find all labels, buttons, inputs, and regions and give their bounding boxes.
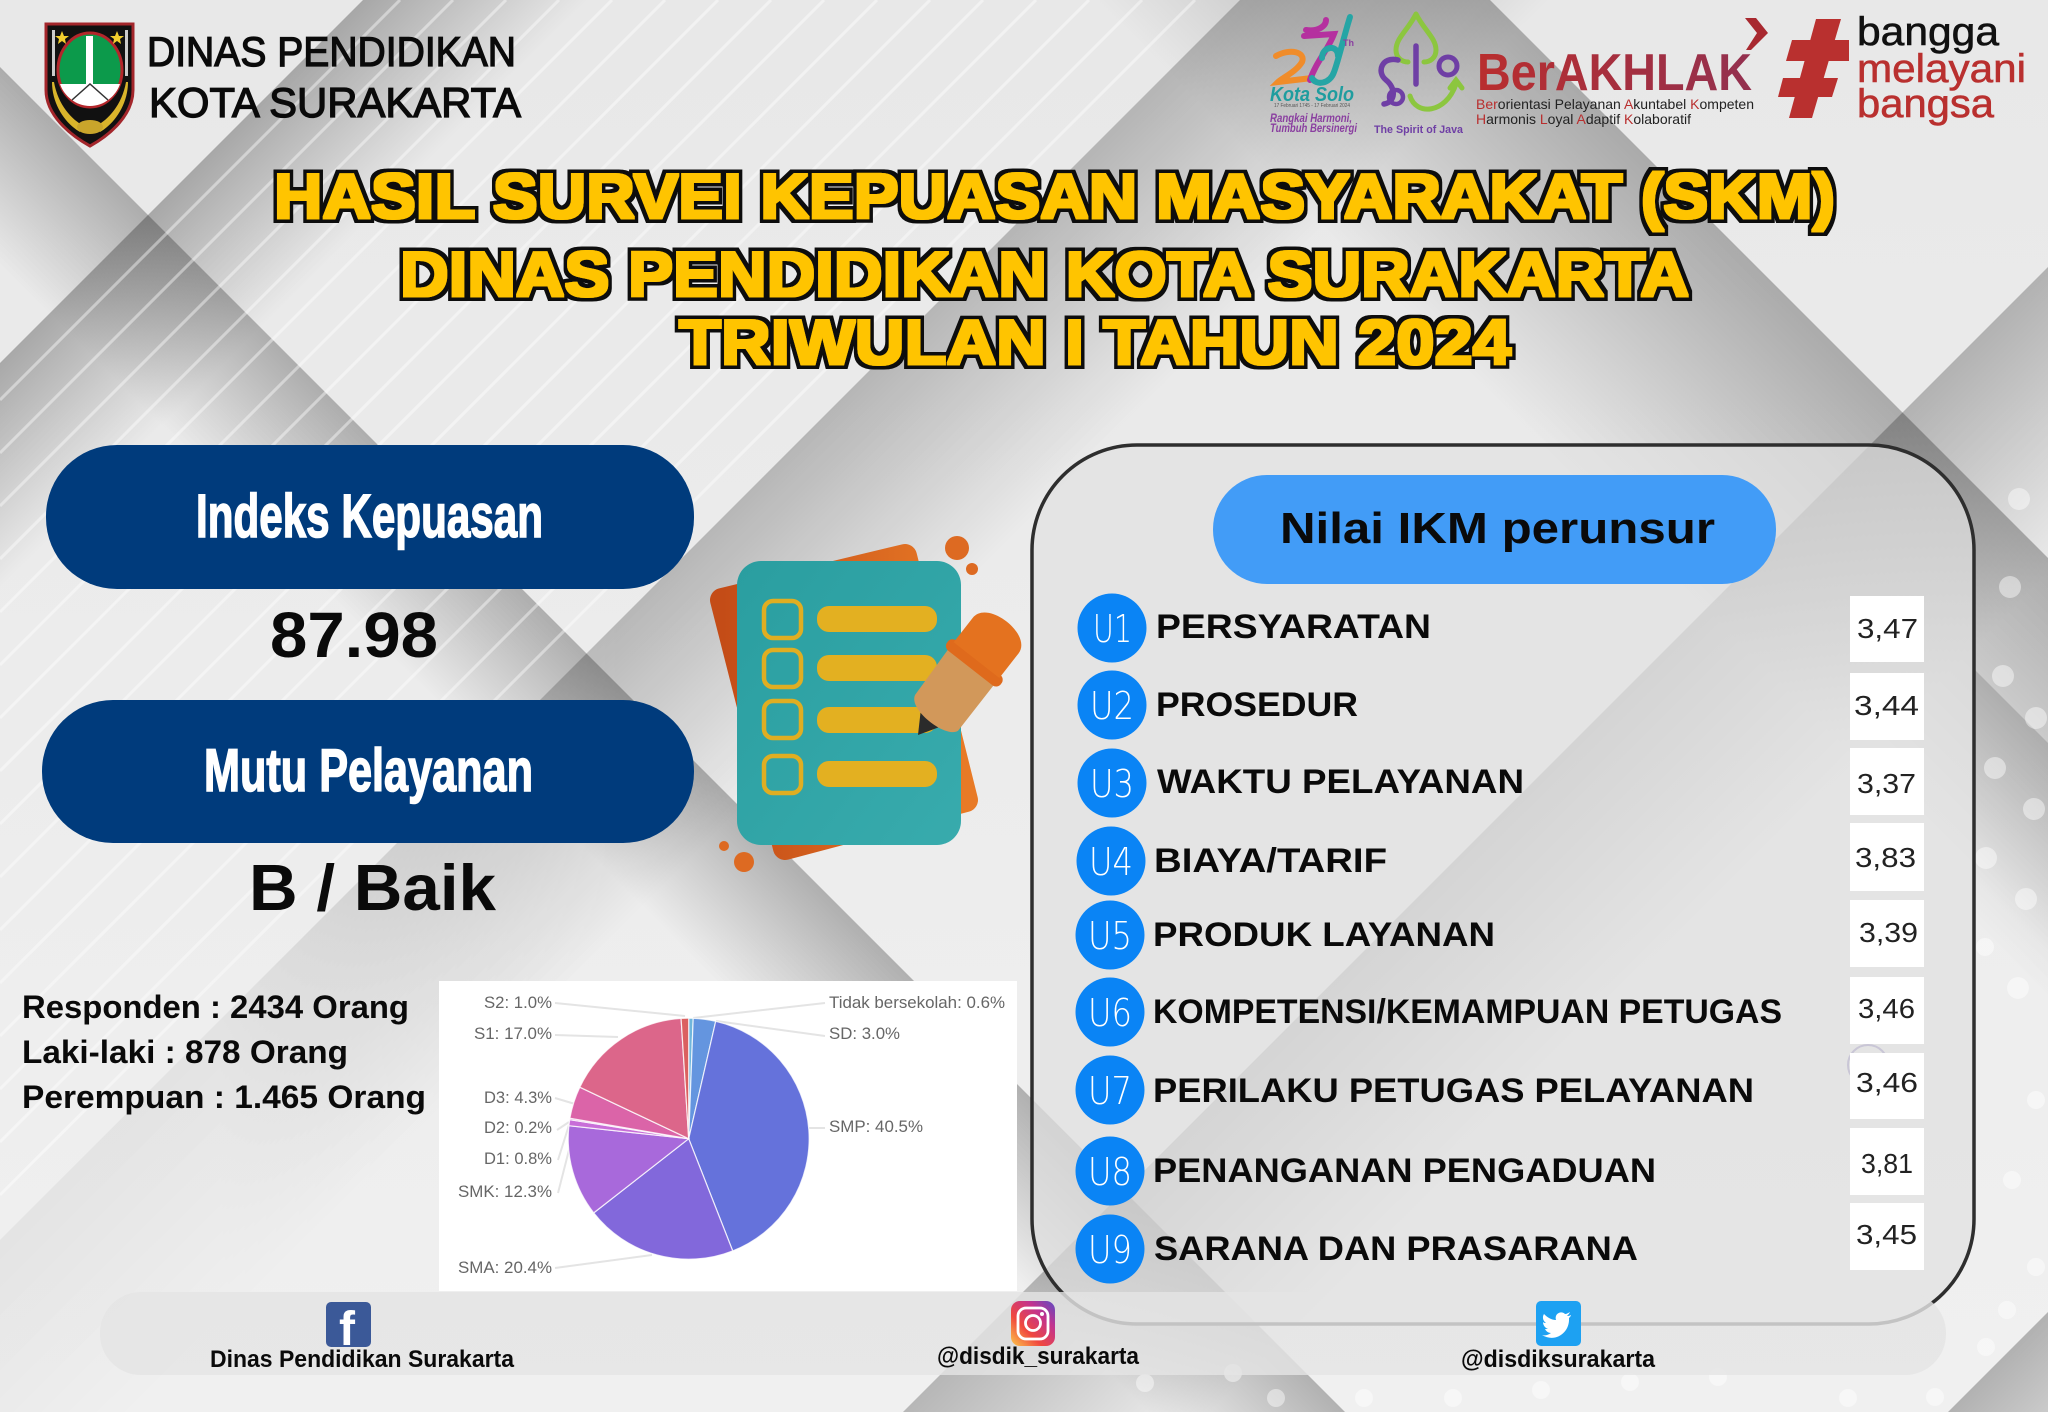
logo: BerAKHLAK [1476, 18, 1768, 127]
chart: education pie chart: Tidak bersekolah: 0.6% [829, 993, 1005, 1012]
icon: facebook: f [339, 1303, 356, 1356]
icon: checklist clipboard with pencil [719, 536, 1033, 872]
row U8 [1076, 1128, 1924, 1206]
chart: education pie chart: S2: 1.0% [484, 993, 552, 1012]
row U3: WAKTU PELAYANAN [1157, 763, 1524, 801]
row U8: U8 [1088, 1150, 1132, 1194]
logo: #banggamelayanibangsa: bangsa [1857, 82, 1995, 126]
row U7: PERILAKU PETUGAS PELAYANAN [1153, 1072, 1754, 1110]
chart: education pie chart: SMP: 40.5% [829, 1117, 923, 1136]
row U9: U9 [1088, 1228, 1132, 1272]
row U4: U4 [1089, 840, 1133, 884]
chart: education pie chart: SD: 3.0% [829, 1024, 900, 1043]
logo: Kota Solo anniversary: Rangkai Harmoni, [1270, 111, 1352, 125]
title: DINAS PENDIDIKAN KOTA SURAKARTA [400, 240, 1689, 310]
row U2: 3,44 [1854, 690, 1919, 721]
row U8: 3,81 [1861, 1148, 1913, 1179]
heading pill: Nilai IKM perunsur [1280, 504, 1715, 553]
row U1: U1 [1093, 607, 1132, 651]
value: service quality: B / Baik [249, 851, 497, 924]
row U8: PENANGANAN PENGADUAN [1153, 1152, 1656, 1190]
footer: social media bar [100, 1292, 1946, 1375]
row U2: PROSEDUR [1156, 686, 1358, 724]
panel: Mutu Pelayanan [42, 700, 694, 843]
panel: Indeks Kepuasan: Indeks Kepuasan [196, 482, 543, 550]
text: twitter handle: @disdiksurakarta [1461, 1346, 1656, 1373]
row U5: 3,39 [1859, 917, 1918, 948]
row U2: U2 [1090, 684, 1134, 728]
title: HASIL SURVEI KEPUASAN MASYARAKAT (SKM) [274, 162, 1835, 232]
text block: respondent counts: Laki-laki : 878 Orang [22, 1034, 348, 1070]
row U4: BIAYA/TARIF [1154, 842, 1387, 880]
panel: Nilai IKM perunsur [1032, 445, 1974, 1324]
row U6: 3,46 [1858, 993, 1915, 1024]
heading pill [1213, 475, 1776, 584]
row U1 [1078, 594, 1924, 662]
logo: Kota Solo anniversary: Th [1343, 38, 1354, 48]
chart: education pie chart: SMA: 20.4% [458, 1258, 552, 1277]
logo: BerAKHLAK: Harmonis Loyal Adaptif Kolaboratif [1476, 111, 1691, 127]
row U6: U6 [1088, 991, 1132, 1035]
icon: instagram [1011, 1301, 1055, 1346]
icon: facebook [326, 1302, 371, 1356]
chart: education pie chart: SMK: 12.3% [458, 1182, 552, 1201]
logo: Surakarta coat of arms shield [46, 24, 133, 146]
row U6 [1076, 977, 1924, 1046]
row U3 [1078, 748, 1924, 818]
row U4 [1076, 823, 1924, 896]
chart: education pie chart [439, 981, 1017, 1291]
logo: Solo The Spirit of Java [1374, 14, 1464, 136]
logo: #banggamelayanibangsa: bangga [1857, 10, 2000, 54]
row U6: KOMPETENSI/KEMAMPUAN PETUGAS [1153, 993, 1782, 1031]
value: index score: 87.98 [270, 599, 438, 671]
logo: Kota Solo anniversary: Tumbuh Bersinergi [1270, 121, 1358, 135]
logo: BerAKHLAK: Berorientasi Pelayanan Akuntabel Kompeten [1476, 96, 1754, 112]
chart: education pie chart: D2: 0.2% [484, 1118, 552, 1137]
header: organisation name [147, 28, 521, 126]
logo: BerAKHLAK: BerAKHLAK [1477, 44, 1752, 102]
row U9 [1076, 1203, 1924, 1284]
row U1: 3,47 [1857, 613, 1918, 644]
header: organisation name: DINAS PENDIDIKAN [147, 28, 516, 75]
row U7 [1076, 1045, 1924, 1124]
row U3: U3 [1090, 762, 1134, 806]
header: organisation name: KOTA SURAKARTA [149, 79, 521, 126]
row U7: 3,46 [1856, 1067, 1918, 1098]
text block: respondent counts [22, 989, 426, 1115]
row U7: U7 [1088, 1069, 1132, 1113]
title [274, 162, 1835, 378]
logo: Kota Solo anniversary: 17 Februari 1745 - 17 Februari 2024 [1274, 103, 1350, 109]
logo: Kota Solo anniversary: Kota Solo [1270, 84, 1354, 106]
logo: #banggamelayanibangsa [1778, 10, 2026, 126]
row U5 [1076, 900, 1924, 970]
chart: education pie chart: D3: 4.3% [484, 1088, 552, 1107]
logo: #banggamelayanibangsa: melayani [1857, 47, 2026, 91]
row U3: 3,37 [1857, 768, 1916, 799]
chart: education pie chart: S1: 17.0% [474, 1024, 552, 1043]
logo: Kota Solo anniversary [1270, 17, 1358, 135]
row U5: U5 [1088, 914, 1132, 958]
row U9: SARANA DAN PRASARANA [1154, 1230, 1638, 1268]
panel: Mutu Pelayanan: Mutu Pelayanan [204, 737, 533, 804]
row U9: 3,45 [1856, 1219, 1917, 1250]
chart: education pie chart: D1: 0.8% [484, 1149, 552, 1168]
icon: twitter [1536, 1301, 1581, 1346]
row U1: PERSYARATAN [1156, 608, 1431, 646]
row U5: PRODUK LAYANAN [1153, 916, 1495, 954]
row U4: 3,83 [1855, 842, 1916, 873]
text: facebook name: Dinas Pendidikan Surakarta [210, 1346, 515, 1373]
text: instagram handle: @disdik_surakarta [937, 1343, 1140, 1370]
text block: respondent counts: Perempuan : 1.465 Orang [22, 1079, 426, 1115]
row U2 [1078, 670, 1924, 740]
text block: respondent counts: Responden : 2434 Orang [22, 989, 409, 1025]
logo: Solo The Spirit of Java: The Spirit of Java [1374, 124, 1464, 136]
title: TRIWULAN I TAHUN 2024 [679, 308, 1511, 378]
panel: Indeks Kepuasan [46, 445, 694, 589]
